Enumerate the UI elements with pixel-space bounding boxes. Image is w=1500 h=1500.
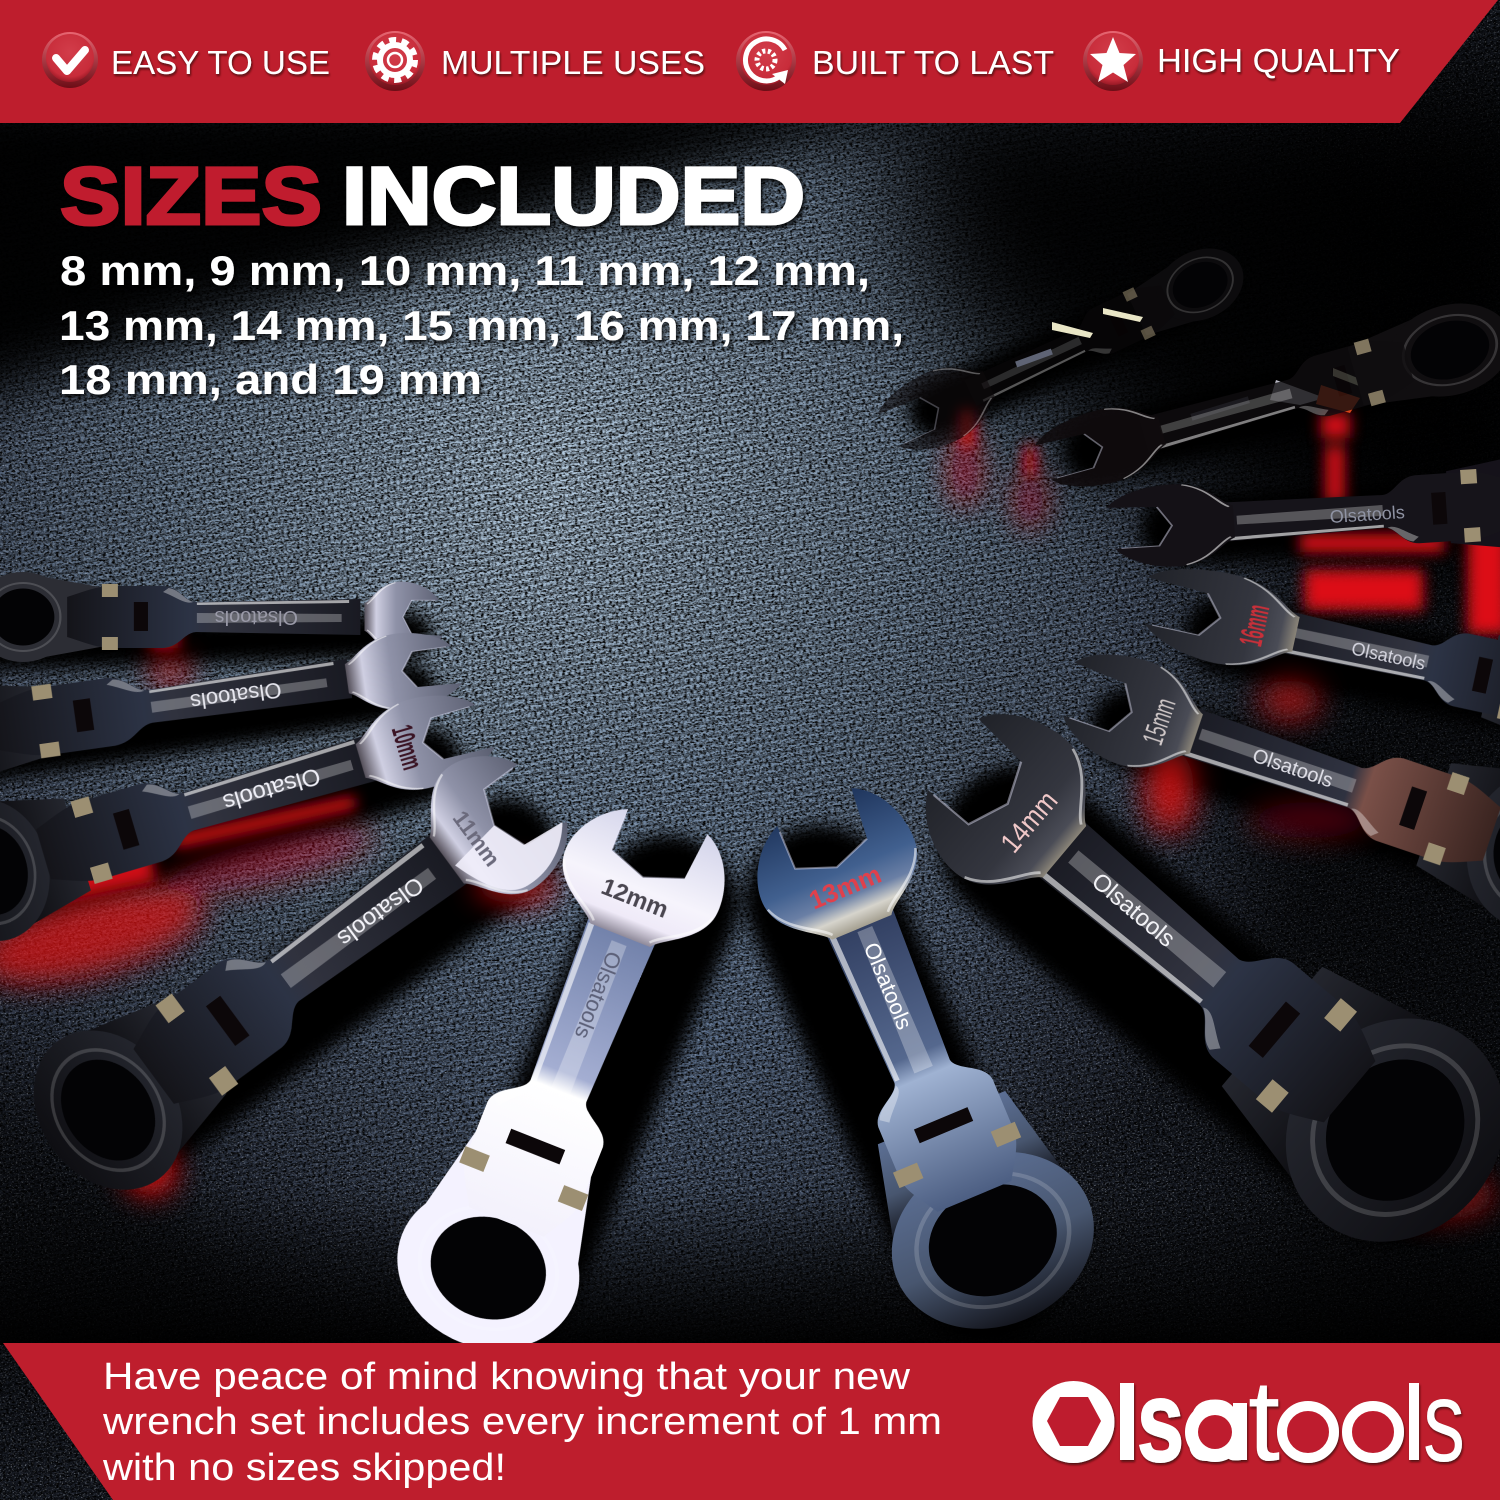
sizes list: 13 mm, 14 mm, 15 mm, 16 mm, 17 mm, <box>59 302 904 349</box>
wrench: 16 mm: 16mm <box>1233 601 1277 649</box>
sizes list: 8 mm, 9 mm, 10 mm, 11 mm, 12 mm, <box>60 247 870 294</box>
wrench: 14 mm <box>874 665 1500 1286</box>
banner shape <box>0 0 1498 123</box>
wrench: 14 mm: Olsatools <box>1086 868 1180 953</box>
top banner <box>0 0 1498 123</box>
wrench: 8 mm <box>0 572 443 662</box>
wrench: 9 mm <box>0 610 467 798</box>
logo: Olsatools: oo <box>1276 1366 1404 1483</box>
logo: Olsatools: s <box>1137 1358 1184 1486</box>
wrench: 10 mm: 10mm <box>385 721 429 773</box>
feature: easy to use <box>42 32 330 88</box>
feature: high quality <box>1083 31 1400 91</box>
sizes list <box>59 247 904 403</box>
logo: Olsatools: s <box>1423 1358 1465 1486</box>
bottom banner <box>3 1343 1500 1500</box>
icon: gear button <box>365 31 425 91</box>
wrench: 12 mm <box>373 784 753 1376</box>
wrench: 13 mm: 13mm <box>805 859 885 915</box>
note text: Have peace of mind knowing that your new <box>103 1356 911 1398</box>
wrench: 11 mm: Olsatools <box>332 871 428 952</box>
wrench: 15 mm: Olsatools <box>1249 745 1336 793</box>
wrench: 11 mm: 11mm <box>448 806 505 871</box>
wrench: 15 mm <box>1039 613 1500 950</box>
heading: sizes included: INCLUDED <box>342 151 805 242</box>
wrench: 10 mm <box>0 655 508 956</box>
icon: star button <box>1083 31 1143 91</box>
logo: Olsatools: t <box>1248 1357 1280 1485</box>
note text <box>102 1356 942 1489</box>
banner shape <box>3 1343 1500 1500</box>
wrench: 17 mm <box>1105 441 1500 584</box>
wrench: 12 mm: Olsatools <box>570 948 627 1042</box>
wrench shadows <box>0 290 1500 1285</box>
note text: wrench set includes every increment of 1 mm <box>102 1401 942 1443</box>
label: BUILT TO LAST <box>812 44 1054 81</box>
heading: sizes included: SIZES <box>60 151 322 242</box>
wrench: 11 mm <box>3 721 594 1219</box>
wrench: 10 mm: Olsatools <box>220 762 323 816</box>
wrench: 18 mm <box>1029 290 1500 508</box>
icon: cycle button <box>736 31 796 91</box>
note text: with no sizes skipped! <box>102 1447 506 1489</box>
wrench: 17 mm: Olsatools <box>1329 502 1405 527</box>
label: HIGH QUALITY <box>1157 42 1400 79</box>
wrench: 12 mm: 12mm <box>597 873 672 924</box>
icon: check button <box>42 32 98 88</box>
wrench: 16 mm <box>1129 539 1500 777</box>
logo: Olsatools <box>1032 1357 1465 1486</box>
label: MULTIPLE USES <box>441 44 705 81</box>
wrench: 16 mm: Olsatools <box>1350 639 1427 674</box>
sizes list: 18 mm, and 19 mm <box>59 356 482 403</box>
heading: sizes included <box>60 151 805 242</box>
wrench: 8 mm: Olsatools <box>215 606 298 628</box>
feature: built to last <box>736 31 1054 91</box>
wrench: 13 mm <box>715 765 1121 1359</box>
logo: Olsatools: a <box>1186 1359 1245 1484</box>
wrench: 14 mm: 14mm <box>994 785 1064 859</box>
red light reflections on the mat <box>0 410 1500 1219</box>
wrench: 9 mm: Olsatools <box>189 677 283 715</box>
label: EASY TO USE <box>111 44 330 81</box>
logo: Olsatools: O <box>1032 1362 1115 1483</box>
wrench: 19 mm <box>871 232 1257 466</box>
feature: multiple uses <box>365 31 705 91</box>
wrench: 13 mm: Olsatools <box>859 939 917 1033</box>
wrench: 15 mm: 15mm <box>1137 694 1182 749</box>
highlights on far wrenches <box>1015 308 1370 421</box>
